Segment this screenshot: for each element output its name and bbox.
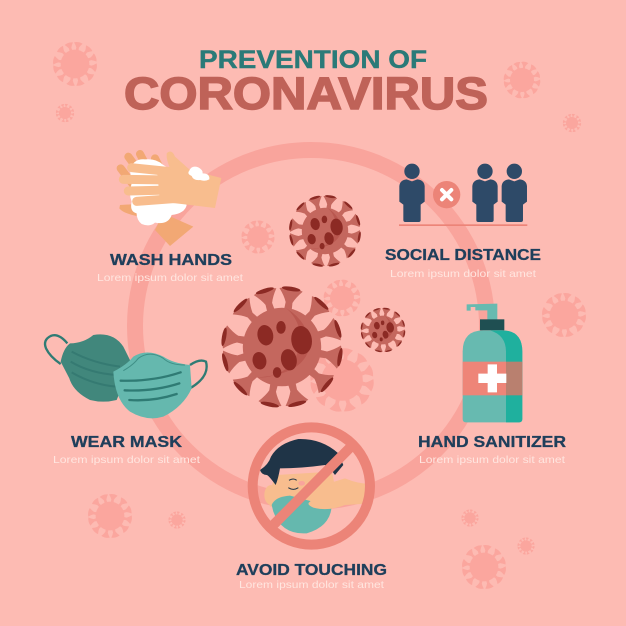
label: wash hands: Lorem ipsum dolor sit amet bbox=[97, 272, 243, 284]
label: social distance: SOCIAL DISTANCE bbox=[385, 247, 541, 264]
label: hand sanitizer: Lorem ipsum dolor sit amet bbox=[419, 454, 565, 466]
icon: wash hands bbox=[119, 151, 221, 246]
label: hand sanitizer: HAND SANITIZER bbox=[418, 434, 566, 451]
label: wear mask: Lorem ipsum dolor sit amet bbox=[53, 454, 200, 466]
title: CORONAVIRUS bbox=[124, 68, 488, 119]
label: wear mask bbox=[53, 434, 200, 466]
label: avoid touching: Lorem ipsum dolor sit amet bbox=[239, 579, 384, 591]
icon: avoid touching bbox=[253, 427, 372, 545]
icon: hand sanitizer bbox=[463, 304, 522, 422]
central virus cluster bbox=[220, 194, 406, 413]
background virus decorations bbox=[52, 41, 587, 590]
title: PREVENTION OF bbox=[199, 46, 427, 74]
title bbox=[124, 46, 488, 119]
label: avoid touching bbox=[236, 562, 387, 591]
label: wash hands: WASH HANDS bbox=[110, 252, 232, 269]
circular ring bbox=[135, 150, 487, 502]
label: wear mask: WEAR MASK bbox=[71, 434, 183, 451]
label: social distance: Lorem ipsum dolor sit amet bbox=[390, 268, 536, 280]
label: hand sanitizer bbox=[418, 434, 566, 466]
label: avoid touching: AVOID TOUCHING bbox=[236, 562, 387, 579]
label: wash hands bbox=[97, 252, 243, 284]
icon: social distance bbox=[399, 164, 527, 226]
icon: face masks bbox=[45, 334, 207, 418]
label: social distance bbox=[385, 247, 541, 280]
